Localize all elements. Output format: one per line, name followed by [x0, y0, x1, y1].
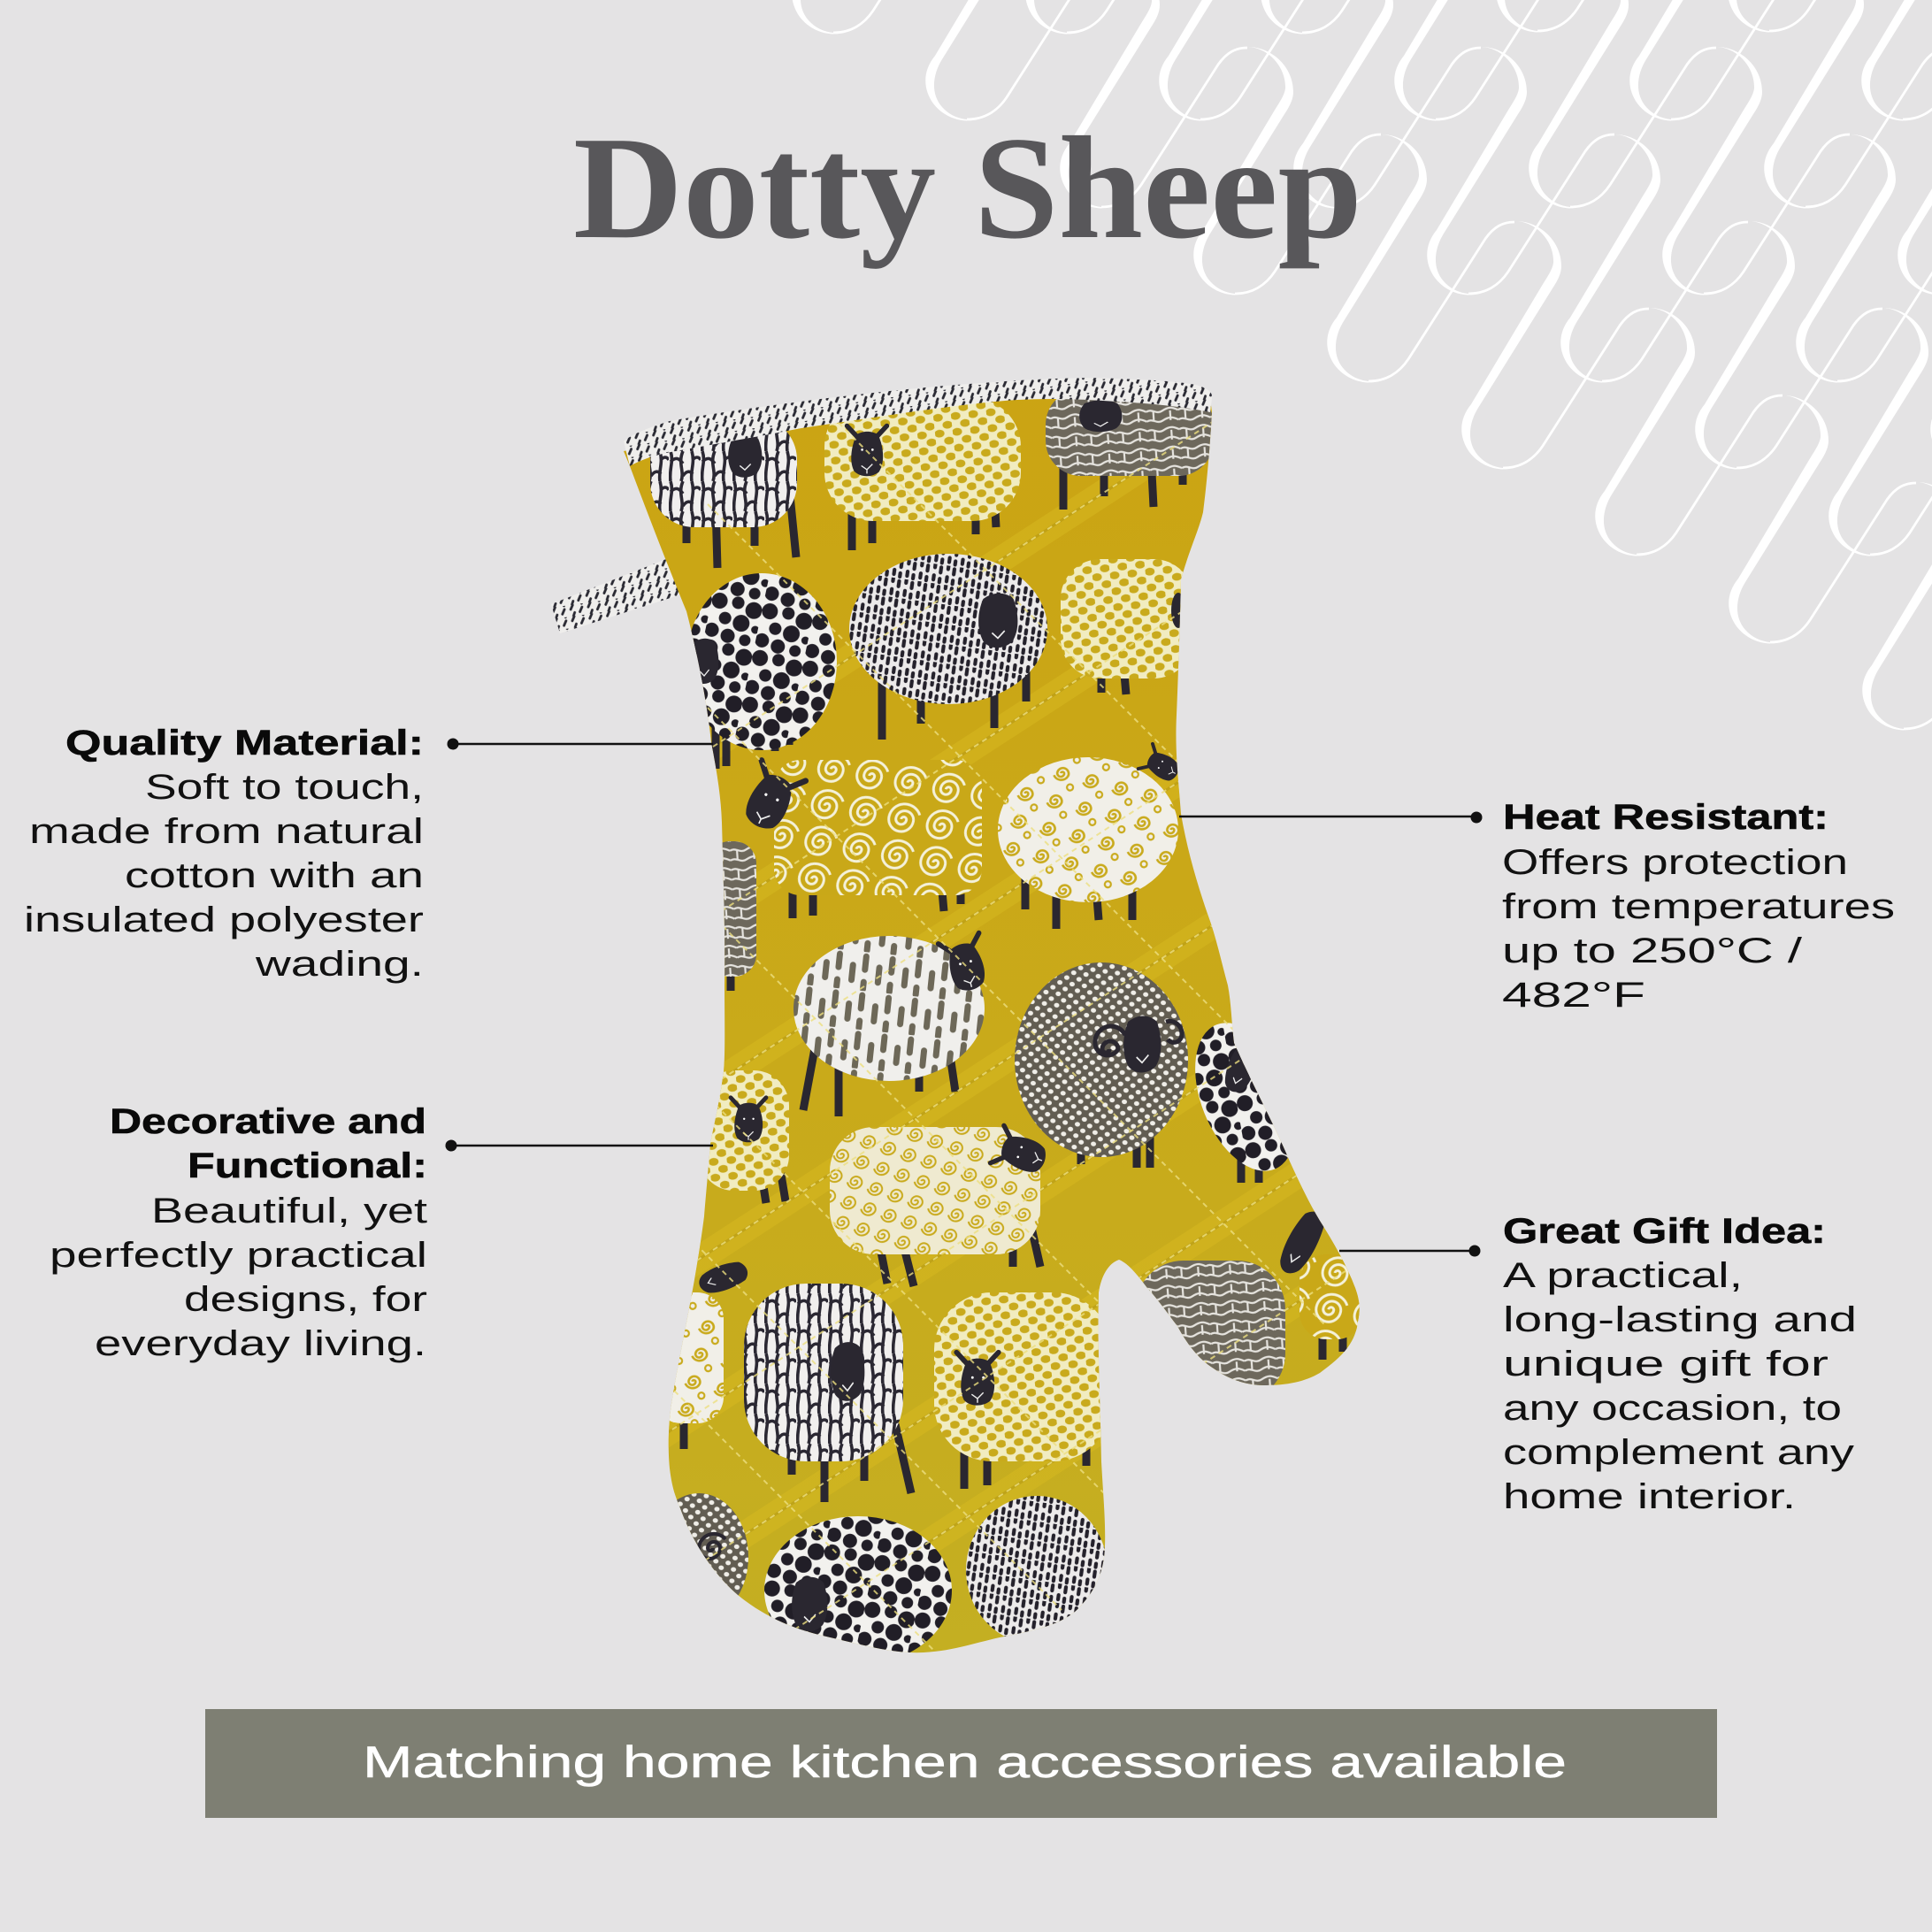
sheep: cream swirl centre — [830, 1125, 1051, 1286]
callout: Quality Material — [24, 724, 713, 984]
sheep: right yellow — [1061, 559, 1193, 694]
connector line — [1339, 1246, 1481, 1256]
description: wading. — [255, 945, 424, 984]
connector line — [446, 1139, 713, 1152]
description: made from natural — [29, 812, 424, 851]
description — [1502, 843, 1895, 1015]
description: Offers protection — [1502, 843, 1848, 882]
description: from temperatures — [1502, 887, 1895, 926]
title: Dotty Sheep — [573, 106, 1362, 269]
description: complement any — [1503, 1433, 1854, 1472]
sheep: grey dashes on white — [794, 933, 993, 1116]
description: long-lasting and — [1503, 1300, 1857, 1339]
sheep: dotted black — [686, 573, 837, 769]
sheep: bottom right dashes — [966, 1496, 1108, 1644]
heading: Great Gift Idea: — [1503, 1212, 1826, 1251]
description — [1503, 1256, 1857, 1516]
description: cotton with an — [125, 856, 424, 895]
description — [50, 1192, 427, 1363]
sheep: lower yellow — [934, 1292, 1111, 1489]
description: A practical, — [1503, 1256, 1743, 1295]
sheep: left grey sliver — [722, 841, 756, 991]
description: 482°F — [1502, 976, 1645, 1015]
sheep: left swirl — [669, 1261, 748, 1449]
sheep: dark dashes round — [849, 554, 1047, 740]
description: everyday living. — [95, 1324, 426, 1363]
sheep: dotted on thumb — [1195, 1023, 1288, 1183]
connector line — [448, 738, 713, 750]
heading: Heat Resistant: — [1503, 798, 1828, 837]
heading: Functional: — [188, 1146, 427, 1185]
glove body with sheep print — [624, 399, 1360, 1652]
description: unique gift for — [1503, 1345, 1828, 1384]
callout: Heat Resistant — [1179, 798, 1895, 1015]
banner text: Matching home kitchen accessories available — [363, 1737, 1567, 1787]
description — [24, 768, 424, 984]
description: perfectly practical — [50, 1236, 427, 1275]
sheep: thumb grey — [1143, 1261, 1285, 1385]
description: Soft to touch, — [145, 768, 424, 807]
description: designs, for — [184, 1280, 427, 1319]
sheep: top right grey — [1046, 389, 1214, 510]
connector line — [1179, 812, 1483, 823]
description: Beautiful, yet — [151, 1192, 427, 1230]
description: insulated polyester — [24, 901, 424, 939]
sheep: yellow swirl on white — [998, 744, 1184, 929]
heading: Quality Material: — [65, 724, 424, 763]
sheep: top centre yellow — [824, 398, 1021, 550]
hanging loop — [551, 559, 681, 633]
heading — [110, 1102, 427, 1185]
sheep: top left dark net — [650, 416, 797, 568]
banner — [205, 1709, 1717, 1818]
callout: Decorative and Functional — [50, 1102, 713, 1363]
sheep: large dark net — [744, 1284, 911, 1502]
sheep: bottom left grey — [677, 1493, 748, 1596]
top binding — [624, 378, 1212, 466]
sheep: thumb swirl — [1280, 1212, 1360, 1360]
callout: Great Gift Idea — [1339, 1212, 1857, 1516]
quilting seams — [669, 421, 1346, 1650]
sheep: ram with grey dots — [1015, 962, 1188, 1168]
description: up to 250°C / — [1502, 932, 1803, 970]
description: home interior. — [1503, 1477, 1796, 1516]
sheep: white swirl — [736, 760, 982, 918]
heading: Decorative and — [110, 1102, 426, 1141]
sheep: bottom dotted — [764, 1516, 952, 1665]
oven glove product image — [551, 292, 1371, 1778]
description: any occasion, to — [1503, 1389, 1842, 1428]
sheep: small yellow left — [699, 1070, 789, 1203]
